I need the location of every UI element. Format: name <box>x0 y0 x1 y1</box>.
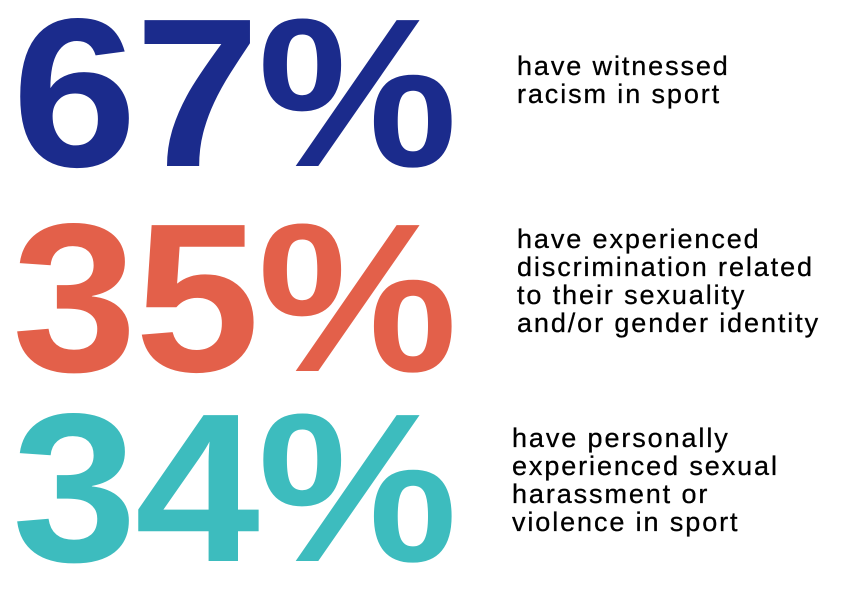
label: discrimination: discrimination related <box>517 252 814 282</box>
label: sexual harassment: harassment or <box>512 479 709 509</box>
label: discrimination: and/or gender identity <box>517 308 820 338</box>
label: witnessed racism: racism in sport <box>517 79 721 109</box>
label: witnessed racism <box>517 51 730 109</box>
label: sexual harassment: experienced sexual <box>512 451 779 481</box>
label: discrimination <box>517 224 820 338</box>
label: witnessed racism: have witnessed <box>517 51 730 81</box>
stat: 35%: 35% <box>12 179 455 416</box>
label: sexual harassment: have personally <box>512 423 730 453</box>
label: discrimination: have experienced <box>517 224 761 254</box>
label: sexual harassment: violence in sport <box>512 507 739 537</box>
label: discrimination: to their sexuality <box>517 280 746 310</box>
stat: 34%: 34% <box>12 369 455 606</box>
label: sexual harassment <box>512 423 779 537</box>
